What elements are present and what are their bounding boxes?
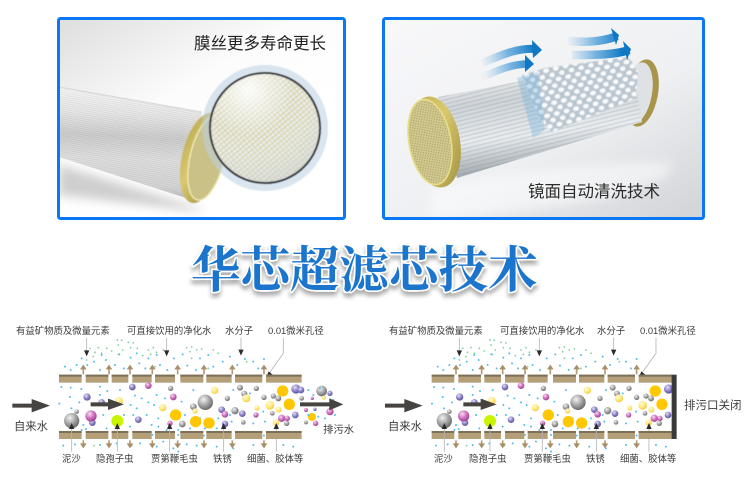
panel caption: left: 膜丝更多寿命更长	[194, 34, 326, 53]
panel caption: right: 镜面自动清洗技术	[528, 182, 660, 201]
inlet label: right: 自来水	[388, 420, 422, 433]
top labels: right: 有益矿物质及微量元素	[389, 325, 483, 336]
bristle bumps	[522, 57, 638, 132]
tube body	[438, 60, 642, 178]
panel: mirror self-cleaning technology	[384, 18, 704, 218]
filter cartridge tube	[59, 87, 202, 198]
top labels: right: 水分子	[597, 325, 625, 336]
tube shadow	[59, 165, 205, 212]
bottom labels: right	[434, 453, 676, 464]
top labels: left: 水分子	[225, 325, 253, 336]
bottom labels: right: 铁锈	[586, 453, 605, 464]
bottom labels: left: 细菌、胶体等	[247, 453, 303, 464]
bottom labels: right: 隐孢子虫	[469, 453, 507, 464]
closed end wall	[639, 375, 677, 439]
panel: longer-life membrane filaments	[58, 18, 344, 218]
blue airflow arrows	[482, 28, 631, 77]
reflection	[438, 162, 669, 214]
top labels: left: 有益矿物质及微量元素	[16, 325, 110, 336]
top labels: left	[16, 325, 324, 336]
main title: 华芯超滤芯技术	[191, 243, 538, 298]
near end cap	[407, 96, 461, 188]
bottom labels: left: 贾第鞭毛虫	[151, 453, 198, 464]
bottom labels: left: 泥沙	[62, 453, 81, 464]
gold end cap	[179, 112, 224, 204]
magnifier lens	[202, 65, 328, 191]
bottom labels: right: 贾第鞭毛虫	[524, 453, 571, 464]
outlet label: 排污水	[323, 423, 355, 436]
top labels: left: 0.01微米孔径	[268, 325, 324, 336]
particles and wall end: left	[266, 375, 343, 439]
top labels: right: 可直接饮用的净化水	[500, 325, 585, 336]
top labels: left: 可直接饮用的净化水	[127, 325, 212, 336]
inlet label: left: 自来水	[14, 420, 48, 433]
bottom labels: left: 铁锈	[213, 453, 232, 464]
top labels: right	[389, 325, 696, 336]
closed drain label: 排污口关闭	[684, 398, 742, 412]
diagram: closed drain filtering	[385, 325, 742, 464]
far end cap	[632, 59, 659, 127]
diagram: open drain filtering	[12, 325, 355, 464]
bottom labels: left	[62, 453, 303, 464]
bottom labels: right: 泥沙	[434, 453, 453, 464]
bottom labels: left: 隐孢子虫	[96, 453, 134, 464]
bottom labels: right: 细菌、胶体等	[620, 453, 676, 464]
top labels: right: 0.01微米孔径	[640, 325, 696, 336]
